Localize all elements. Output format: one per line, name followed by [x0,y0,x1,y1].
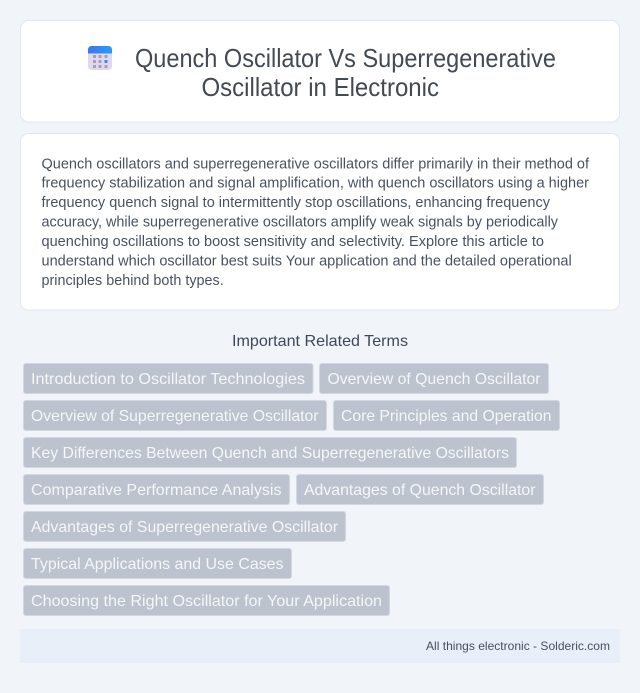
tag: key differences: Key Differences Between Quench and Superregenerative Oscillators [31,445,509,462]
tag: key differences [24,438,516,468]
title: Oscillator in Electronic [202,74,439,102]
tag: advantages of superregenerative [24,512,346,542]
tag: comparative performance [24,474,290,504]
tag: choosing the right oscillator [24,586,390,616]
tag: overview of quench [320,364,548,394]
description text: accuracy, while superregenerative oscillators amplify weak signals by periodically [42,214,559,230]
panel: description [20,134,620,310]
tag: choosing the right oscillator: Choosing the Right Oscillator for Your Application [31,593,382,610]
tag: core principles: Core Principles and Operation [341,408,552,425]
tag: overview of superregenerative [24,400,326,430]
description text: principles behind both types. [42,273,224,289]
tag list [24,364,560,616]
tag: overview of superregenerative: Overview of Superregenerative Oscillator [31,408,319,425]
heading: important related terms: Important Related Terms [232,333,408,350]
description text: frequency stabilization and signal amplification, with quench oscillators using a higher [42,176,589,192]
description text: frequency quench signal to intermittently stop oscillations, enhancing frequency [42,195,551,211]
tag: typical applications [24,548,292,578]
title [135,45,556,102]
tag: introduction: Introduction to Oscillator Technologies [31,371,305,388]
description text: Quench oscillators and superregenerative oscillators differ primarily in their method of [42,156,590,172]
title: Quench Oscillator Vs Superregenerative [135,45,556,73]
panel: title card [20,20,620,122]
description text [42,156,590,289]
tag: overview of quench: Overview of Quench Oscillator [328,371,541,388]
footer credit: All things electronic - Solderic.com [426,639,610,653]
tag: typical applications: Typical Applications and Use Cases [31,556,284,573]
description text: quenching oscillations to boost sensitivity and selectivity. Explore this article to [42,234,544,250]
icon: calendar [88,46,112,70]
tag: advantages of superregenerative: Advantages of Superregenerative Oscillator [31,519,339,536]
tag: advantages of quench [296,474,544,504]
footer [20,629,620,663]
tag: core principles [334,400,560,430]
tag: introduction [24,364,313,394]
tag: advantages of quench: Advantages of Quench Oscillator [304,482,536,499]
tag: comparative performance: Comparative Performance Analysis [31,482,282,499]
description text: understand which oscillator best suits Your application and the detailed operational [42,253,572,269]
